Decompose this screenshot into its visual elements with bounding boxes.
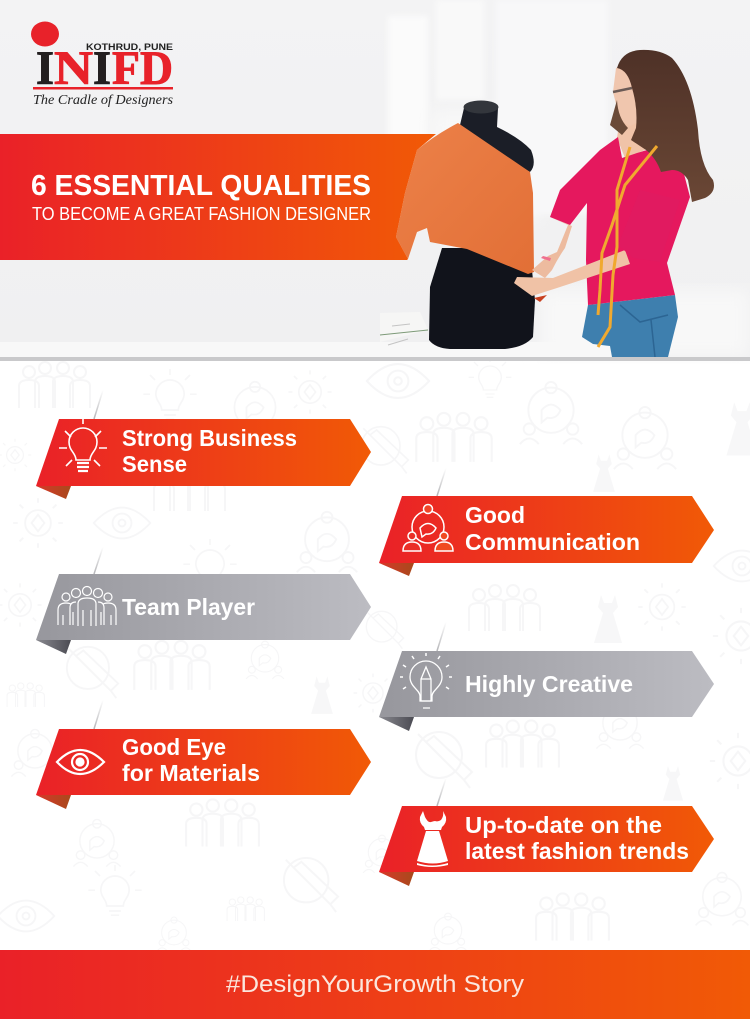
icon: pencil in bulb [400, 653, 452, 708]
ribbon: Strong Business Sense: Sense [122, 451, 187, 477]
logo: INIFD Kothrud, Pune: N [54, 42, 93, 95]
ribbon: Good Communication: Communication [465, 529, 640, 555]
ribbon: Highly Creative [379, 622, 714, 731]
ribbon: Good Eye for Materials: Good Eye [122, 734, 226, 760]
hero photo: fashion designer draping a mannequin [0, 0, 750, 361]
face [613, 62, 640, 126]
background pattern of faint icons [0, 357, 750, 951]
icon: communication circle [403, 504, 453, 551]
logo: INIFD Kothrud, Pune: KOTHRUD, PUNE [86, 42, 173, 53]
icon: team of people [58, 586, 116, 626]
subtitle: TO BECOME A GREAT FASHION DESIGNER [32, 204, 371, 224]
logo: INIFD Kothrud, Pune: I [93, 42, 111, 95]
icon: eye [57, 750, 104, 774]
hair [617, 50, 714, 202]
ribbon: Strong Business Sense [36, 390, 371, 499]
ribbon: Team Player: Team Player [122, 594, 255, 620]
pink shirt [550, 137, 690, 305]
ribbon: Good Communication: Good [465, 502, 525, 528]
forearm and hand [514, 250, 630, 296]
ribbon: Good Eye for Materials: for Materials [122, 760, 260, 786]
icon: light bulb [59, 415, 107, 471]
footer band with hashtag: #DesignYourGrowth Story [226, 971, 524, 998]
logo: INIFD Kothrud, Pune [31, 22, 174, 108]
ribbon: Up-to-date on the latest fashion trends: Up-to-date on the [465, 812, 662, 838]
ribbon: Good Communication [379, 468, 714, 576]
ribbon: Good Eye for Materials [36, 700, 371, 809]
logo: INIFD Kothrud, Pune: FD [112, 42, 173, 95]
ribbon: Up-to-date on the latest fashion trends [379, 778, 714, 886]
sleeve over forearm [618, 190, 680, 262]
ribbon: Up-to-date on the latest fashion trends: latest fashion trends [465, 838, 689, 864]
jeans [582, 295, 678, 357]
logo: INIFD Kothrud, Pune: The Cradle of Designers [33, 93, 174, 108]
table edge [0, 357, 750, 361]
draped orange fabric [396, 123, 534, 274]
measuring tape [598, 146, 657, 347]
icon: dress [417, 811, 448, 867]
title: 6 ESSENTIAL QUALITIES [31, 170, 371, 202]
mannequin [429, 100, 547, 349]
logo: INIFD Kothrud, Pune: I [36, 42, 54, 95]
ribbon: Team Player [36, 547, 371, 654]
footer band with hashtag [0, 950, 750, 1019]
studio backdrop [0, 0, 750, 357]
upper arm skin [532, 217, 572, 278]
sketch papers on table [380, 312, 428, 345]
ribbon: Highly Creative: Highly Creative [465, 671, 633, 697]
neck [617, 118, 645, 158]
designer [514, 50, 714, 357]
header banner [0, 134, 436, 260]
ribbon: Strong Business Sense: Strong Business [122, 425, 297, 451]
